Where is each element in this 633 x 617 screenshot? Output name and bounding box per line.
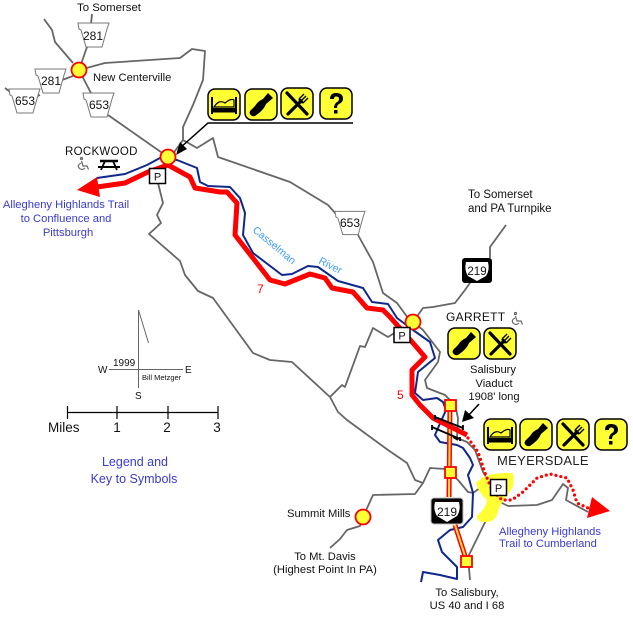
label: Summit Mills: Summit Mills	[287, 508, 351, 520]
junction squares on 219	[445, 400, 472, 567]
compass: E	[185, 365, 192, 376]
compass: 1999	[113, 358, 136, 369]
label: Meyersdale: MEYERSDALE	[497, 453, 589, 468]
label: To Salisbury: US 40 and I 68	[430, 600, 504, 612]
station: Garrett	[406, 314, 420, 330]
scale bar: Miles	[48, 420, 80, 435]
station: Rockwood	[160, 150, 176, 164]
scale bar: 3	[213, 420, 221, 435]
shield: 281 north: 281	[83, 29, 103, 43]
label: Garrett: GARRETT	[446, 310, 506, 324]
label: trail to Pittsburgh: to Confluence and	[21, 213, 111, 225]
icon: picnic table	[98, 161, 120, 170]
mile marker 7: 7	[257, 282, 264, 296]
parking: Garrett: P	[398, 330, 406, 342]
red trail: Rockwood to Viaduct	[97, 165, 467, 435]
shield: 653 east	[335, 211, 365, 235]
arrow: to viaduct	[462, 404, 479, 422]
shield: 653 south	[83, 93, 114, 117]
shield: 281 north	[78, 23, 109, 47]
shield: US 219 north: 219	[467, 266, 487, 278]
shield: US 219 south: 219	[437, 505, 457, 519]
yellow highlight: Meyersdale trailhead	[476, 473, 514, 522]
shield: 281 west: 281	[41, 74, 61, 88]
highway 219	[449, 405, 467, 562]
label: To Mt. Davis: (Highest Point In PA)	[273, 564, 377, 576]
shield: 653 south: 653	[89, 98, 109, 112]
parking: Rockwood: P	[154, 172, 161, 184]
legend link: Legend and	[102, 455, 168, 469]
icons: Rockwood services	[208, 88, 352, 120]
parking: Meyersdale: P	[495, 483, 502, 495]
label: To Somerset and PA Turnpike: and PA Turnpike	[468, 203, 552, 215]
Salisbury Viaduct bridge	[432, 415, 463, 441]
label: New Centerville: New Centerville	[93, 72, 171, 84]
label: Salisbury Viaduct: Viaduct	[475, 378, 513, 390]
icons: Meyersdale services	[484, 419, 627, 450]
shield: US 219 south	[431, 498, 463, 524]
label: River: River	[317, 255, 344, 277]
compass: S	[135, 391, 142, 402]
label: Salisbury Viaduct: Salisbury	[470, 364, 516, 376]
shield: 281 west	[35, 69, 66, 93]
shield: 653 west	[9, 89, 40, 113]
legend link: Key to Symbols	[91, 472, 177, 486]
icons: Garrett services	[448, 328, 516, 359]
label: Salisbury Viaduct: 1908' long	[468, 391, 520, 403]
scale bar: 2	[163, 420, 171, 435]
arrow: trail to Cumberland	[587, 497, 610, 518]
station: New Centerville	[72, 62, 86, 78]
callout arrow: Rockwood services	[176, 123, 353, 155]
parking: Meyersdale	[490, 480, 506, 496]
icon: wheelchair Rockwood	[78, 158, 88, 170]
compass	[98, 310, 192, 402]
parking: Rockwood	[150, 168, 166, 184]
label: Rockwood: ROCKWOOD	[65, 146, 138, 158]
mile marker 5: 5	[397, 388, 404, 402]
shield: 653 east: 653	[340, 216, 360, 230]
label: trail to Cumberland: Trail to Cumberland	[499, 538, 597, 550]
label: trail to Pittsburgh: Allegheny Highlands Trail	[3, 199, 129, 211]
label: To Salisbury: To Salisbury,	[435, 587, 499, 599]
label: To Mt. Davis: To Mt. Davis	[294, 551, 356, 563]
scale bar: 1	[113, 420, 121, 435]
station: Summit Mills	[356, 510, 370, 524]
label: Casselman: Casselman	[250, 224, 298, 267]
label: To Somerset and PA Turnpike: To Somerset	[468, 189, 533, 201]
shield: 653 west: 653	[15, 94, 35, 108]
icon: wheelchair Garrett	[512, 312, 522, 324]
parking: Garrett	[394, 328, 410, 342]
dotted trail to Cumberland	[468, 438, 590, 509]
scale bar	[48, 406, 221, 435]
label: To Somerset: To Somerset	[77, 2, 142, 14]
compass: W	[98, 365, 108, 376]
compass: Bill Metzger	[142, 373, 182, 382]
shield: US 219 north	[462, 258, 492, 283]
Casselman River	[97, 158, 473, 582]
label: trail to Pittsburgh: Pittsburgh	[43, 227, 93, 239]
label: trail to Cumberland: Allegheny Highlands	[499, 526, 601, 538]
arrow: trail to Pittsburgh	[77, 177, 100, 197]
